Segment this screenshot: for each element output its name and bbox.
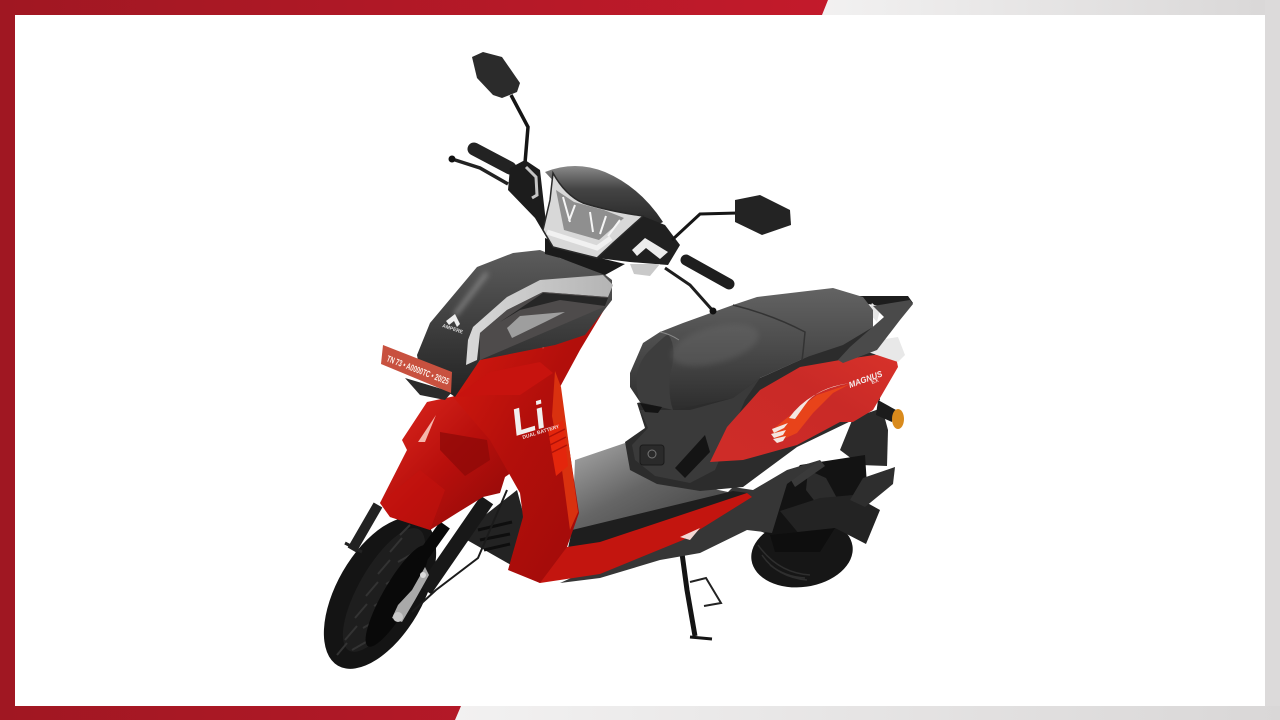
front shield	[453, 305, 607, 583]
number plate stay	[405, 378, 452, 400]
side stand	[681, 546, 721, 639]
right mirror	[672, 195, 791, 240]
tail light	[868, 337, 905, 362]
Li badge: DUAL BATTERY	[522, 424, 561, 441]
front fender	[380, 395, 515, 530]
number plate: TN 73 • A0000TC • 20/25	[385, 354, 450, 387]
panel graphic	[771, 383, 850, 443]
brake cable	[412, 490, 507, 612]
brake disc caliper	[392, 567, 429, 622]
headlight neck	[545, 238, 625, 275]
headlight	[543, 173, 643, 258]
front tyre	[301, 499, 459, 687]
motor and swingarm	[752, 455, 895, 552]
number plate	[381, 345, 452, 393]
seat	[630, 288, 873, 413]
silver trim	[466, 275, 613, 365]
Li badge: Li	[506, 394, 552, 445]
model suffix: EX	[871, 378, 880, 386]
rear red panel	[710, 352, 898, 462]
rear wheel	[747, 512, 857, 594]
under-shield black parts	[467, 490, 525, 565]
lower grey frame	[560, 460, 820, 583]
cowl	[545, 166, 680, 276]
scooter	[301, 52, 913, 687]
brand mark: AMPERE	[441, 323, 464, 336]
right grip and lever	[665, 260, 729, 314]
rear mudguard and indicator	[840, 400, 904, 466]
red side strip	[510, 493, 752, 583]
left fork	[345, 505, 378, 552]
grab rail	[838, 296, 913, 363]
model name: MAGNUS	[847, 368, 884, 390]
under-seat body	[625, 327, 880, 491]
floorboard	[568, 443, 748, 548]
right fork	[420, 500, 487, 590]
left grip and lever	[448, 149, 510, 184]
left mirror	[472, 52, 528, 163]
brand mark	[441, 314, 464, 336]
black leg shield top	[417, 250, 612, 397]
left switch housing	[508, 160, 548, 240]
